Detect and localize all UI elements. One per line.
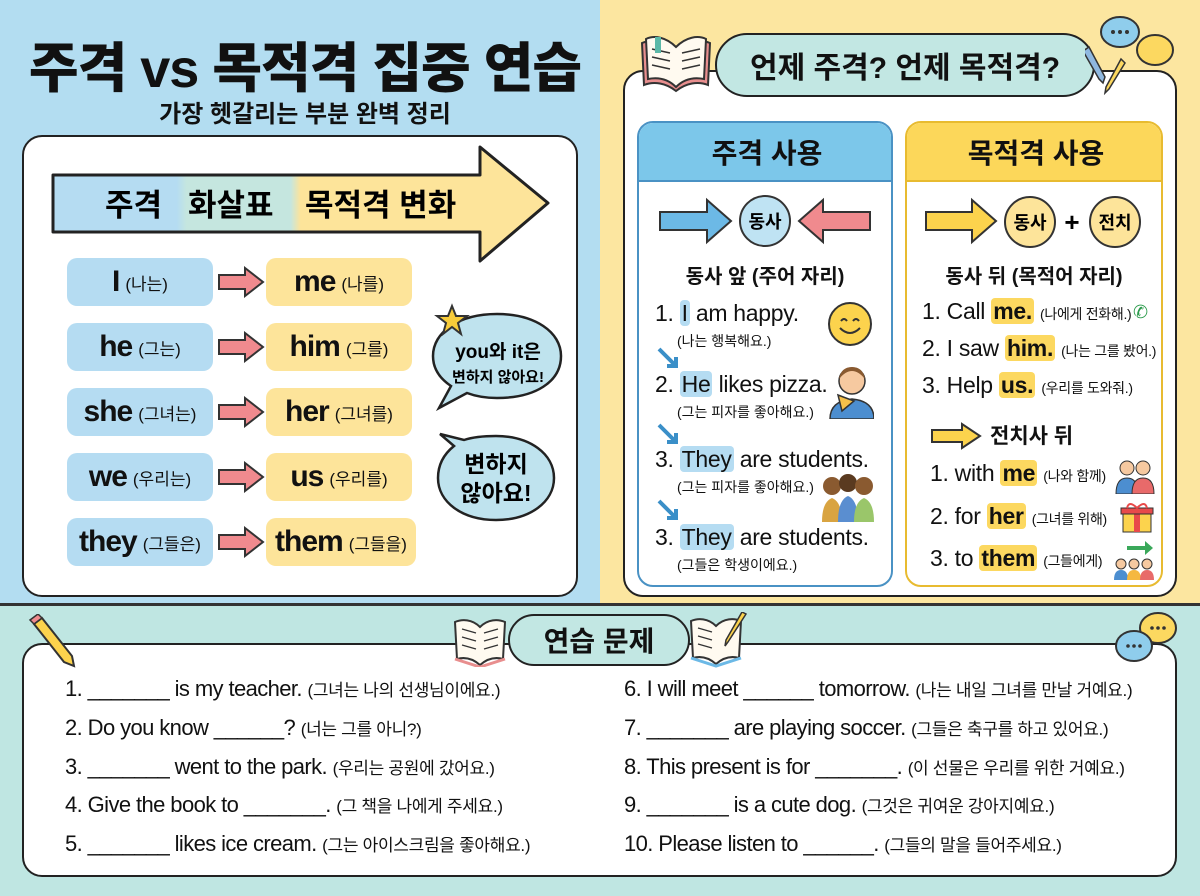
row: they -> them (67, 518, 416, 566)
big arrow header: 화살표 (188, 188, 274, 223)
examples: subject: 1. I am happy. (655, 300, 799, 326)
row: he -> him: him (290, 330, 340, 363)
subheading: after preposition: 전치사 뒤 (990, 425, 1073, 448)
card header: 목적격 사용 (968, 138, 1104, 168)
questions: left column (65, 676, 530, 856)
examples: subject (655, 300, 869, 573)
row: I -> me: (나는) (125, 274, 168, 294)
row: we -> us: us (290, 460, 323, 493)
examples: subject: (그들은 학생이에요.) (677, 557, 797, 573)
card: subject use (637, 121, 893, 587)
examples: after verb: 1. Call me. (나에게 전화해.) (922, 298, 1131, 324)
row: she -> her: her (285, 395, 329, 428)
diagram: verb + preposition: + (1064, 207, 1080, 237)
questions: right column: 10. Please listen to ______. (그들의 말을 들어주세요.) (624, 831, 1062, 856)
diagram: verb + preposition: 동사 (1013, 213, 1047, 233)
icon: open book (641, 36, 711, 92)
diagram: verb + preposition (925, 196, 1141, 248)
card header (639, 123, 895, 182)
icon: couple (1116, 460, 1154, 494)
examples: after preposition: 3. to them (그들에게) (930, 545, 1102, 571)
icon: smiley (828, 302, 872, 346)
subtitle: 가장 헷갈리는 부분 완벽 정리 (159, 101, 451, 128)
icon: group with arrow (1114, 541, 1154, 580)
examples: subject: 3. They are students. (655, 524, 869, 550)
card: object use (905, 121, 1163, 587)
examples: subject: (나는 행복해요.) (677, 333, 771, 349)
questions: right column: 6. I will meet ______ tomorrow. (나는 내일 그녀를 만날 거예요.) (624, 676, 1132, 701)
card header: 주격 사용 (712, 138, 822, 168)
row: she -> her: (그녀를) (335, 404, 393, 424)
heading pill: practice (508, 614, 690, 666)
row: we -> us: (우리는) (133, 470, 191, 488)
examples: subject: 2. He likes pizza. (655, 371, 827, 397)
background: left (0, 0, 600, 603)
icon: book left (454, 619, 506, 667)
row: I -> me: (나를) (341, 274, 384, 294)
examples: after verb (922, 298, 1156, 398)
big arrow header: 주격 (105, 188, 162, 223)
row: he -> him: he (99, 330, 132, 363)
row: he -> him: (그를) (346, 340, 388, 358)
questions: right column: 7. _______ are playing soccer. (그들은 축구를 하고 있어요.) (624, 715, 1108, 740)
title: 주격 vs 목적격 집중 연습 (29, 39, 581, 99)
callout: no change: 변하지 (464, 451, 528, 477)
examples: after preposition (930, 460, 1107, 571)
callout: you and it (432, 303, 562, 411)
icon: small arrows (658, 348, 678, 520)
icon: book right with pencil (690, 612, 747, 668)
subheading: after preposition (931, 422, 1073, 450)
callout: no change: 않아요! (460, 480, 532, 506)
questions: left column: 1. _______ is my teacher. (그녀는 나의 선생님이에요.) (65, 676, 500, 701)
callout: you and it: you와 it은 (455, 341, 541, 363)
big arrow header: 목적격 변화 (305, 188, 456, 223)
row: he -> him: (그는) (138, 340, 181, 358)
subheading: 동사 뒤 (목적어 자리) (945, 266, 1123, 288)
questions: right column: 8. This present is for _______. (이 선물은 우리를 위한 거예요.) (624, 754, 1125, 779)
diagram: arrows to verb (659, 195, 871, 247)
row: she -> her: she (84, 395, 132, 428)
row: we -> us: (우리를) (329, 470, 388, 488)
row: they -> them: (그들은) (143, 534, 201, 554)
examples: after preposition: 2. for her (그녀를 위해) (930, 503, 1107, 529)
icon: boy eating pizza (829, 367, 874, 419)
examples: after preposition: 1. with me (나와 함께) (930, 460, 1106, 486)
row: she -> her (67, 388, 412, 436)
icon: pencil (28, 614, 76, 668)
panel: when to use (623, 70, 1177, 597)
background: bottom (0, 603, 1200, 896)
heading pill (715, 33, 1095, 97)
row: he -> him (67, 323, 412, 371)
questions: left column: 5. _______ likes ice cream. (그는 아이스크림을 좋아해요.) (65, 831, 530, 856)
examples: after verb: 3. Help us. (우리를 도와줘.) (922, 372, 1133, 398)
row: she -> her: (그녀는) (138, 404, 196, 424)
icon: chat bubbles (1115, 612, 1177, 662)
row: we -> us: we (89, 460, 127, 493)
questions: right column (624, 676, 1132, 856)
examples: subject: (그는 피자를 좋아해요.) (677, 479, 814, 495)
icon: phone: ✆ (1133, 302, 1148, 322)
panel: practice problems (22, 643, 1177, 877)
background: right (600, 0, 1200, 603)
questions: left column: 4. Give the book to _______. (그 책을 나에게 주세요.) (65, 792, 503, 817)
row: they -> them: them (275, 525, 343, 558)
row: I -> me: me (294, 265, 335, 298)
examples: subject: (그는 피자를 좋아해요.) (677, 404, 814, 420)
heading pill: practice: 연습 문제 (544, 626, 654, 657)
icon: star (437, 306, 467, 334)
callout: no change (436, 432, 556, 522)
row: I -> me: I (112, 265, 119, 298)
card header (907, 123, 1165, 182)
questions: left column: 3. _______ went to the park. (우리는 공원에 갔어요.) (65, 754, 495, 779)
icon: students (822, 474, 874, 522)
icon: pencils and chat bubbles (1085, 16, 1174, 95)
row: they -> them: they (79, 525, 137, 558)
icon: gift (1120, 503, 1154, 532)
row: we -> us (67, 453, 412, 501)
diagram: verb + preposition: 전치 (1098, 213, 1132, 233)
heading pill: 언제 주격? 언제 목적격? (750, 52, 1060, 85)
row: I -> me (67, 258, 412, 306)
panel: pronoun changes (22, 135, 578, 597)
row: they -> them: (그들을) (349, 534, 407, 554)
examples: subject: 3. They are students. (655, 446, 869, 472)
callout: you and it: 변하지 않아요! (452, 369, 544, 386)
questions: left column: 2. Do you know ______? (너는 그를 아니?) (65, 715, 421, 740)
big arrow header (52, 146, 550, 263)
subheading: 동사 앞 (주어 자리) (686, 266, 844, 288)
diagram: arrows to verb: 동사 (748, 212, 782, 232)
examples: after verb: 2. I saw him. (나는 그를 봤어.) (922, 335, 1156, 361)
questions: right column: 9. _______ is a cute dog. (그것은 귀여운 강아지예요.) (624, 792, 1054, 817)
